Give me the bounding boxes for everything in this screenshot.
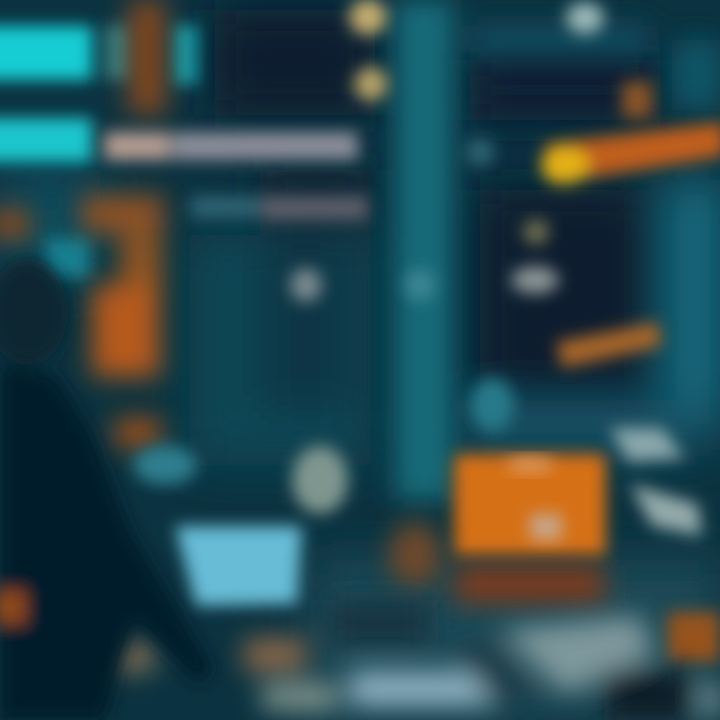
cyan screens top left bbox=[0, 25, 198, 278]
orange glowing sign right bbox=[541, 122, 720, 184]
yellow lights top centre bbox=[349, 0, 652, 118]
laptop screen bbox=[175, 526, 302, 606]
silhouette: person at desk bbox=[0, 258, 212, 720]
orange column left bbox=[0, 0, 166, 448]
orange small sign right bbox=[556, 322, 662, 368]
orange box lower right bbox=[389, 454, 606, 603]
teal column bbox=[395, 0, 720, 500]
stacked pale devices right bbox=[610, 428, 720, 662]
small pale lights centre bbox=[133, 138, 559, 514]
desk clutter bottom bbox=[100, 600, 720, 720]
pale horizontal bands bbox=[104, 132, 368, 220]
